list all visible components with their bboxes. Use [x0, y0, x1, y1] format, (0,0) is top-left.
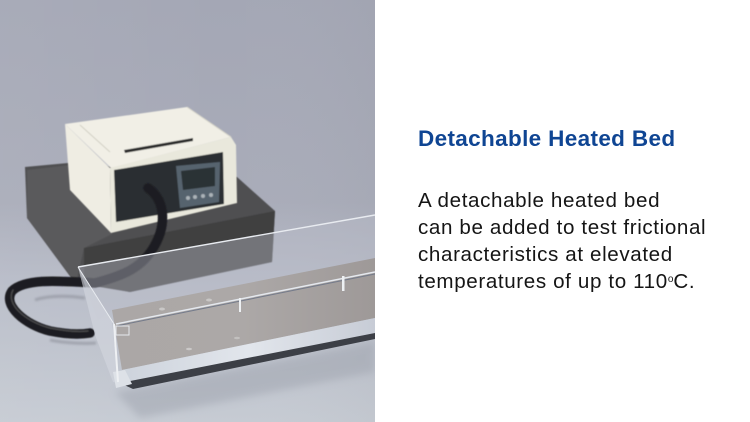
- body text: characteristics at elevated: [418, 243, 673, 266]
- heading: Detachable Heated Bed: [418, 126, 675, 151]
- backdrop: [0, 0, 375, 422]
- cable shadow: [35, 296, 96, 343]
- photo: heated bed controller and tray: [0, 0, 375, 422]
- body text: can be added to test frictional: [418, 216, 706, 239]
- acrylic tray: [78, 215, 375, 389]
- tray shadow: [115, 342, 375, 418]
- heater control box: [65, 107, 237, 233]
- body text: [418, 189, 706, 293]
- temperature controller: [176, 162, 220, 208]
- body text: A detachable heated bed: [418, 189, 660, 212]
- cable: [10, 188, 163, 334]
- body text: temperatures of up to 110oC.: [418, 270, 695, 293]
- foam pad: [25, 163, 275, 292]
